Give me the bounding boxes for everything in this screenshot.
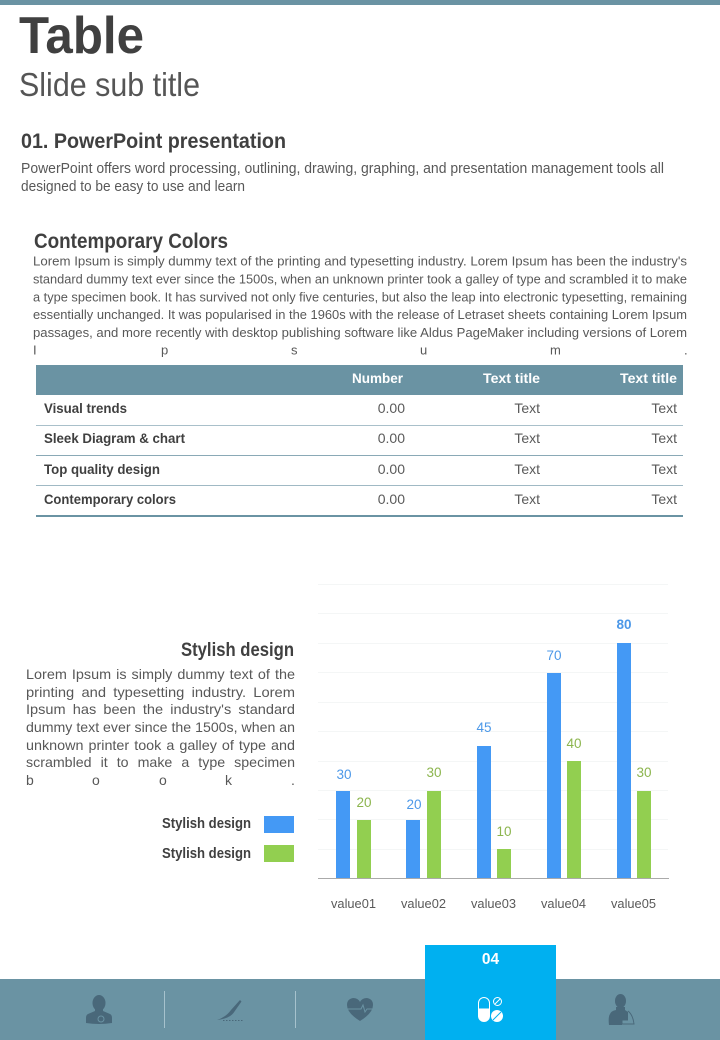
section description bbox=[21, 160, 664, 195]
table row: contemporary colors: 0.00 bbox=[378, 491, 405, 507]
body text: unknown printer took a galley of type and bbox=[26, 737, 295, 753]
heading: stylish design: Stylish design bbox=[181, 640, 294, 661]
table bbox=[36, 365, 683, 517]
table row: contemporary colors bbox=[36, 491, 683, 517]
body text: o bbox=[159, 772, 167, 788]
table row: visual trends: 0.00 bbox=[378, 400, 405, 416]
table row: top quality: Top quality design bbox=[44, 461, 160, 477]
active tab bbox=[425, 945, 556, 1040]
body text: b bbox=[26, 772, 34, 788]
blue value labels bbox=[336, 617, 632, 812]
green value labels: 30 bbox=[636, 765, 652, 780]
axis labels: value02 bbox=[401, 897, 446, 911]
body text: . bbox=[291, 772, 295, 788]
paragraph: contemporary colors: m bbox=[550, 342, 561, 358]
paragraph: contemporary colors: . bbox=[684, 342, 688, 358]
paragraph: contemporary colors: standard dummy text ever since the 1500s, when an unknown printer took a galley of type and scrambled it to make bbox=[33, 272, 687, 286]
table row: visual trends: Visual trends bbox=[44, 400, 127, 416]
table row: visual trends: Text bbox=[514, 400, 540, 416]
axis line bbox=[318, 878, 669, 879]
table row: sleek diagram: Sleek Diagram & chart bbox=[44, 430, 185, 446]
blue value labels: 30 bbox=[336, 767, 352, 782]
icon: pills bbox=[478, 998, 503, 1022]
body text: k bbox=[225, 772, 233, 788]
table row: visual trends bbox=[36, 400, 683, 426]
legend: Stylish design bbox=[162, 816, 251, 832]
body text: dummy text ever since the 1500s, when an bbox=[26, 719, 295, 735]
green value labels: 20 bbox=[356, 795, 372, 810]
icon: patient bbox=[609, 994, 634, 1025]
top bar bbox=[0, 0, 720, 5]
paragraph: contemporary colors: essentially unchanged. It was popularised in the 1960s with the release of Letraset sheets containing Lorem Ipsum bbox=[33, 307, 687, 322]
tab number: 04 bbox=[482, 951, 499, 968]
table row: sleek diagram: Text bbox=[514, 430, 540, 446]
table row: contemporary colors: Contemporary colors bbox=[44, 491, 176, 507]
paragraph: contemporary colors: s bbox=[291, 342, 298, 358]
text block: stylish design bbox=[26, 640, 295, 788]
paragraph: contemporary colors: u bbox=[420, 342, 427, 358]
table row: visual trends: Text bbox=[651, 400, 677, 416]
blue value labels: 20 bbox=[406, 797, 422, 812]
paragraph: contemporary colors: a type specimen book. It has survived not only five centuries, but also the leap into electronic typesetting, remaining bbox=[33, 290, 687, 304]
panel heading: contemporary colors: Contemporary Colors bbox=[34, 230, 228, 253]
body text: scrambled it to make a type specimen bbox=[26, 754, 295, 770]
body text: Ipsum has been the industry's standard bbox=[26, 701, 295, 717]
table row: top quality: Text bbox=[651, 461, 677, 477]
section heading: 01. PowerPoint presentation bbox=[21, 130, 286, 153]
green value labels: 40 bbox=[566, 736, 582, 751]
table row: contemporary colors: Text bbox=[514, 491, 540, 507]
paragraph: contemporary colors: I bbox=[33, 342, 37, 358]
section description: designed to be easy to use and learn bbox=[21, 178, 245, 195]
paragraph: contemporary colors: passages, and more recently with desktop publishing software like Aldus PageMaker including versions of Lorem bbox=[33, 325, 687, 340]
table header: Number bbox=[352, 370, 404, 386]
table row: sleek diagram: 0.00 bbox=[378, 430, 405, 446]
icon: heart bbox=[347, 998, 373, 1021]
green value labels: 10 bbox=[496, 824, 512, 839]
blue value labels: 70 bbox=[546, 648, 562, 663]
axis labels: value01 bbox=[331, 897, 376, 911]
icon: doctor bbox=[86, 995, 112, 1024]
table header: Text title bbox=[483, 370, 540, 386]
footer navigation bbox=[0, 945, 720, 1040]
table header bbox=[36, 365, 683, 395]
axis labels: value05 bbox=[611, 897, 656, 911]
legend: Stylish design bbox=[162, 846, 251, 862]
paragraph: contemporary colors: p bbox=[161, 342, 168, 358]
paragraph: contemporary colors: Lorem Ipsum is simply dummy text of the printing and typesetting industry. Lorem Ipsum has been the industry's bbox=[33, 254, 687, 268]
green bars bbox=[357, 761, 651, 879]
green value labels bbox=[356, 736, 652, 839]
paragraph: contemporary colors bbox=[33, 254, 688, 358]
body text bbox=[26, 666, 295, 788]
axis labels: value03 bbox=[471, 897, 516, 911]
subtitle: Slide sub title bbox=[19, 66, 200, 103]
blue value labels: 45 bbox=[476, 720, 492, 735]
table header: Text title bbox=[620, 370, 677, 386]
table row: top quality bbox=[36, 461, 683, 486]
axis labels bbox=[331, 897, 656, 911]
table row: contemporary colors: Text bbox=[651, 491, 677, 507]
body text: Lorem Ipsum is simply dummy text of the bbox=[26, 666, 295, 682]
table row: top quality: Text bbox=[514, 461, 540, 477]
table row: sleek diagram: Text bbox=[651, 430, 677, 446]
blue value labels: 80 bbox=[616, 617, 632, 632]
icon: scalpel bbox=[217, 1000, 243, 1020]
title: Table bbox=[19, 7, 144, 65]
green value labels: 30 bbox=[426, 765, 442, 780]
section description: PowerPoint offers word processing, outlining, drawing, graphing, and presentation management tools all bbox=[21, 160, 664, 177]
legend bbox=[162, 816, 294, 862]
table row: sleek diagram bbox=[36, 430, 683, 456]
blue bars bbox=[336, 643, 631, 879]
axis labels: value04 bbox=[541, 897, 586, 911]
body text: o bbox=[92, 772, 100, 788]
body text: printing and typesetting industry. Lorem bbox=[26, 684, 295, 700]
bar chart bbox=[318, 584, 669, 911]
table row: top quality: 0.00 bbox=[378, 461, 405, 477]
